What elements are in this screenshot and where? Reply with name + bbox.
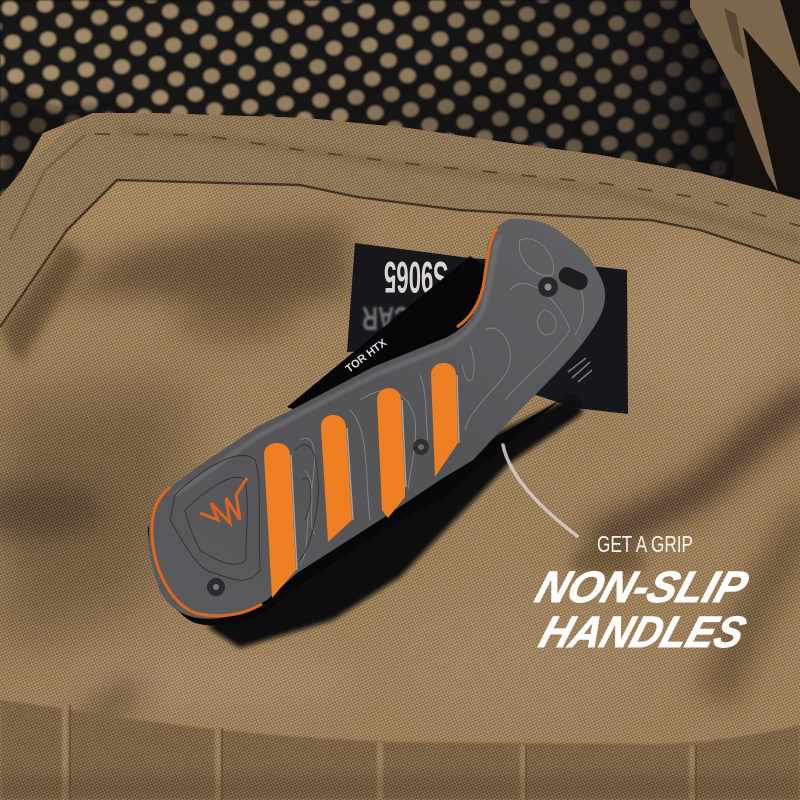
knife handle <box>148 219 605 619</box>
knife rear details <box>148 400 560 626</box>
orange grip stripe 4 <box>431 363 458 477</box>
handle light bevel <box>175 235 500 495</box>
patch second row lettering: USA CAR <box>362 300 462 337</box>
orange grip stripe 2 <box>321 415 352 542</box>
screw top <box>538 277 558 297</box>
arrow: pointer stroke <box>503 445 577 536</box>
fabric fold highlights and shadows <box>0 160 800 732</box>
knife blade <box>287 256 492 412</box>
orange logo <box>200 478 247 523</box>
orange grip stripe 3 <box>377 388 405 518</box>
handle orange edge <box>152 228 497 616</box>
knife tang lines <box>568 358 592 382</box>
screw middle <box>413 439 429 455</box>
black velcro patch <box>347 243 628 414</box>
background: beige strap top right <box>690 0 800 210</box>
orange grip stripe 1 <box>264 443 296 598</box>
callout: get a grip: GET A GRIP <box>597 531 693 557</box>
blade engraving: TOR HTX <box>344 336 390 375</box>
callout: non-slip handles <box>530 562 755 657</box>
ridged thumb slider <box>556 265 590 293</box>
topographic contour lines <box>300 239 584 565</box>
stripe bevel highlights <box>291 375 459 570</box>
top hem band <box>0 106 800 327</box>
dark contour lines on lower handle <box>170 445 318 580</box>
heading line two: HANDLES <box>534 607 752 657</box>
patch white lettering: S9065 <box>384 252 448 301</box>
drop shadow under knife <box>207 395 583 648</box>
bottom webbing strip <box>0 700 800 800</box>
heading line one: NON-SLIP <box>530 562 755 612</box>
screw bottom <box>207 578 225 596</box>
